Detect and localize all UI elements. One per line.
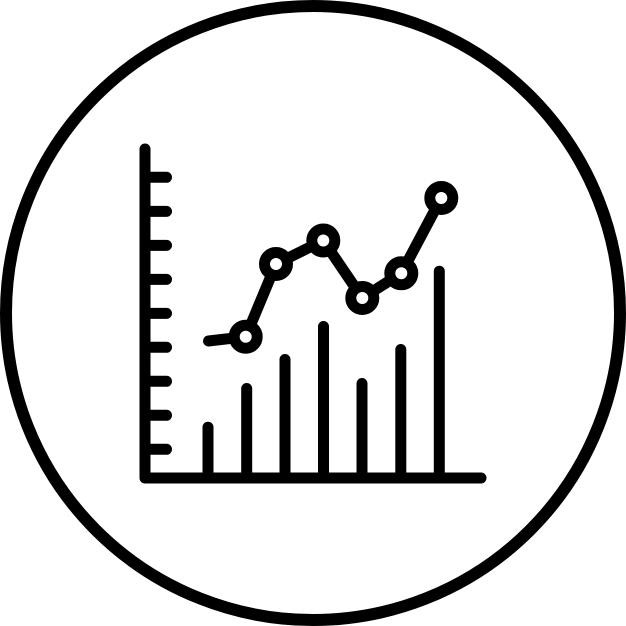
trend line [208,198,441,341]
bars [208,271,439,478]
chart axes [145,149,481,478]
data points [234,186,453,348]
y axis ticks [145,177,166,449]
